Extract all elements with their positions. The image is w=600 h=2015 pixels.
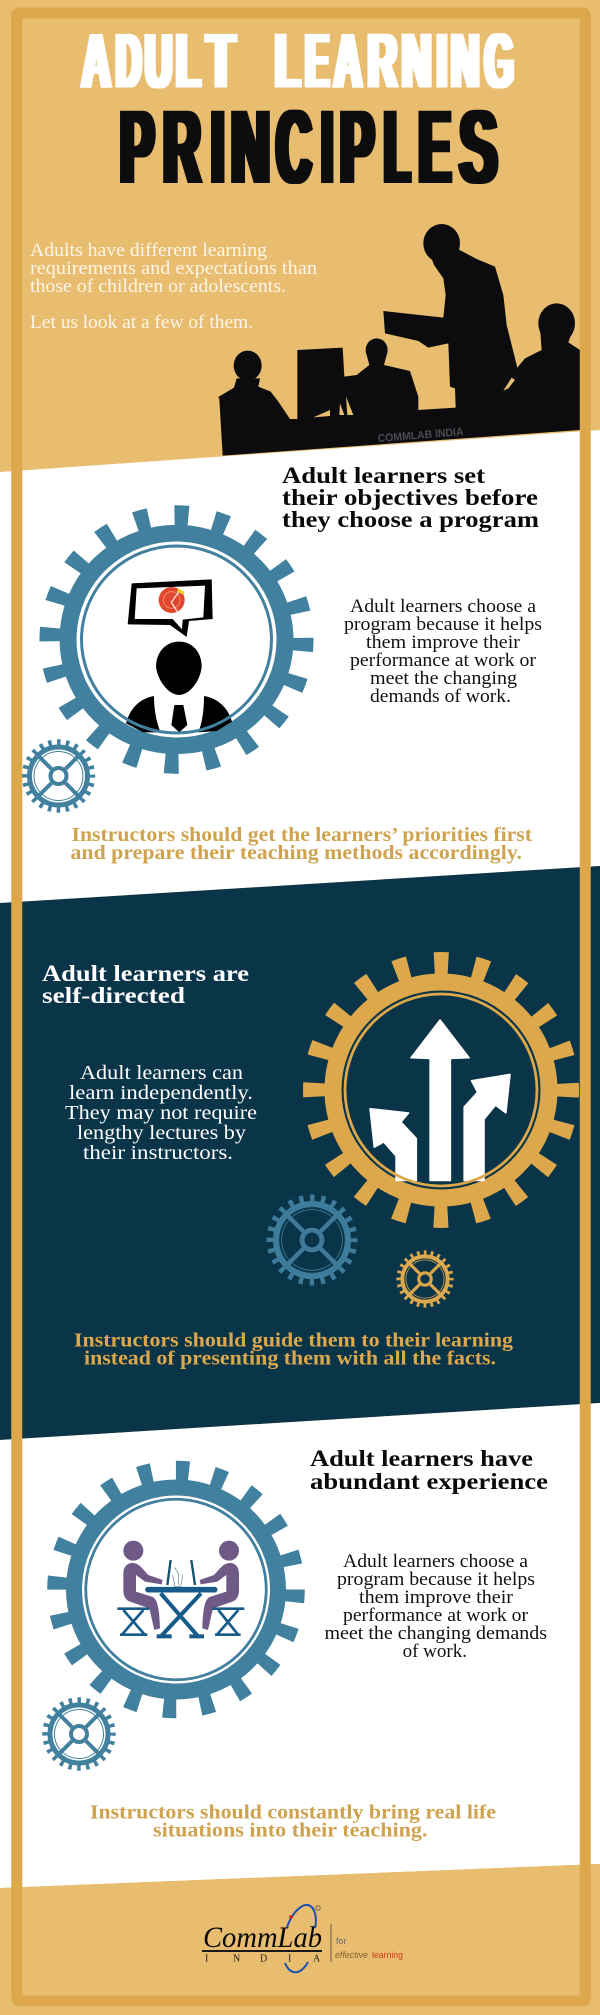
intro text [30,240,317,333]
heading 2 [42,961,249,1008]
body text 3: them improve their [359,1587,514,1608]
icon: three arrows [370,1020,510,1181]
callout 3: situations into their teaching. [153,1821,428,1842]
intro text: those of children or adolescents. [30,276,286,297]
icon: small gear [25,742,92,810]
callout 2: Instructors should guide them to their learning [74,1330,513,1352]
logo: CommLab India: for [336,1936,347,1946]
logo: CommLab India: A [313,1954,321,1965]
title line 2: R [163,89,201,206]
title line 1: N [451,17,479,105]
icon: large gear with learner and target [45,511,308,768]
panel: white section 3 [0,1403,600,1888]
watermark: COMMLAB INDIA [377,426,464,445]
body text 3: meet the changing demands [324,1623,547,1644]
callout 3: Instructors should constantly bring real life [90,1802,496,1824]
body text 1: them improve their [366,632,521,653]
icon: small gear [46,1700,112,1768]
panel: white section 1 [0,430,600,903]
icon: small gold gear [399,1253,451,1305]
title line 1 [82,17,513,105]
logo: CommLab India: effective [335,1950,368,1960]
title line 1: A [334,17,362,105]
body text 3: of work. [403,1641,467,1662]
title line 2: P [340,89,374,206]
title line 2: I [322,89,332,206]
icon: small blue gear [270,1198,354,1282]
title line 1: N [402,17,431,105]
title line 2: S [460,89,497,206]
silhouette: classroom scene [218,224,580,456]
heading 3: abundant experience [310,1469,548,1494]
body text 1: demands of work. [370,686,511,707]
title line 2: E [419,89,451,206]
body text 1: meet the changing [370,668,517,689]
title line 1: E [305,17,329,105]
intro text: Let us look at a few of them. [30,312,253,333]
body text 1: performance at work or [350,650,537,671]
body text 2: their instructors. [83,1142,233,1164]
heading 2: self-directed [42,983,185,1008]
title line 2: P [120,89,154,206]
title line 2: L [384,89,410,206]
panel content: section 1 [25,463,542,864]
logo: CommLab India: D [260,1954,267,1965]
heading 1: their objectives before [282,485,538,510]
people at table [117,1541,244,1637]
body text 3: program because it helps [337,1569,535,1590]
logo: CommLab India: CommLab [203,1921,322,1954]
title line 1: A [82,17,111,105]
title line 1: U [145,17,172,105]
intro text: Adults have different learning [30,240,267,261]
gaps in silhouette [313,378,515,417]
logo: CommLab India: learning [372,1950,403,1960]
panel content: section 2 [42,961,568,1370]
heading 3 [310,1446,548,1494]
body text 3: Adult learners choose a [343,1551,528,1572]
body text 2 [65,1062,257,1164]
title line 1: T [206,17,235,105]
heading 3: Adult learners have [310,1446,533,1471]
title line 2: I [212,89,224,206]
logo: CommLab India: I [288,1954,291,1965]
panel: navy section 2 [0,866,600,1440]
heading 1: they choose a program [282,507,539,532]
body text 2: learn independently. [69,1082,253,1104]
body text 3 [324,1551,547,1662]
callout 1: Instructors should get the learners’ priorities first [72,825,533,846]
body text 1: Adult learners choose a [350,596,536,617]
body text 3: performance at work or [343,1605,529,1626]
title line 1: D [116,17,141,105]
icon: large gear with two people at a table [51,1465,301,1714]
body text 2: lengthy lectures by [77,1122,246,1144]
logo: CommLab India [202,1905,403,1972]
intro text: requirements and expectations than [30,258,317,279]
body text 2: Adult learners can [80,1062,243,1084]
icon: large gold gear with arrows [314,964,568,1216]
title line 2: C [276,89,311,206]
body text 2: They may not require [65,1102,257,1124]
callout 1: and prepare their teaching methods accordingly. [70,843,522,864]
logo: CommLab India: I [205,1954,208,1965]
callout 2: instead of presenting them with all the facts. [84,1348,496,1370]
bottom gold band [0,1864,600,2015]
callout 2 [74,1330,513,1370]
logo: CommLab India: N [233,1954,240,1965]
title line 1: I [437,17,447,105]
title [82,17,513,206]
infographic canvas: G [485,17,514,105]
heading 1: Adult learners set [282,463,485,488]
body text 1 [344,596,542,707]
panel content: section 3 [46,1446,548,1842]
callout 3 [90,1802,496,1842]
heading 1 [282,463,539,532]
callout 1 [70,825,533,864]
body text 1: program because it helps [344,614,542,635]
title line 1: L [176,17,200,105]
title line 1: L [275,17,300,105]
title line 2: N [231,89,270,206]
heading 2: Adult learners are [42,961,249,986]
learner figure [126,579,232,732]
title line 1: R [368,17,397,105]
